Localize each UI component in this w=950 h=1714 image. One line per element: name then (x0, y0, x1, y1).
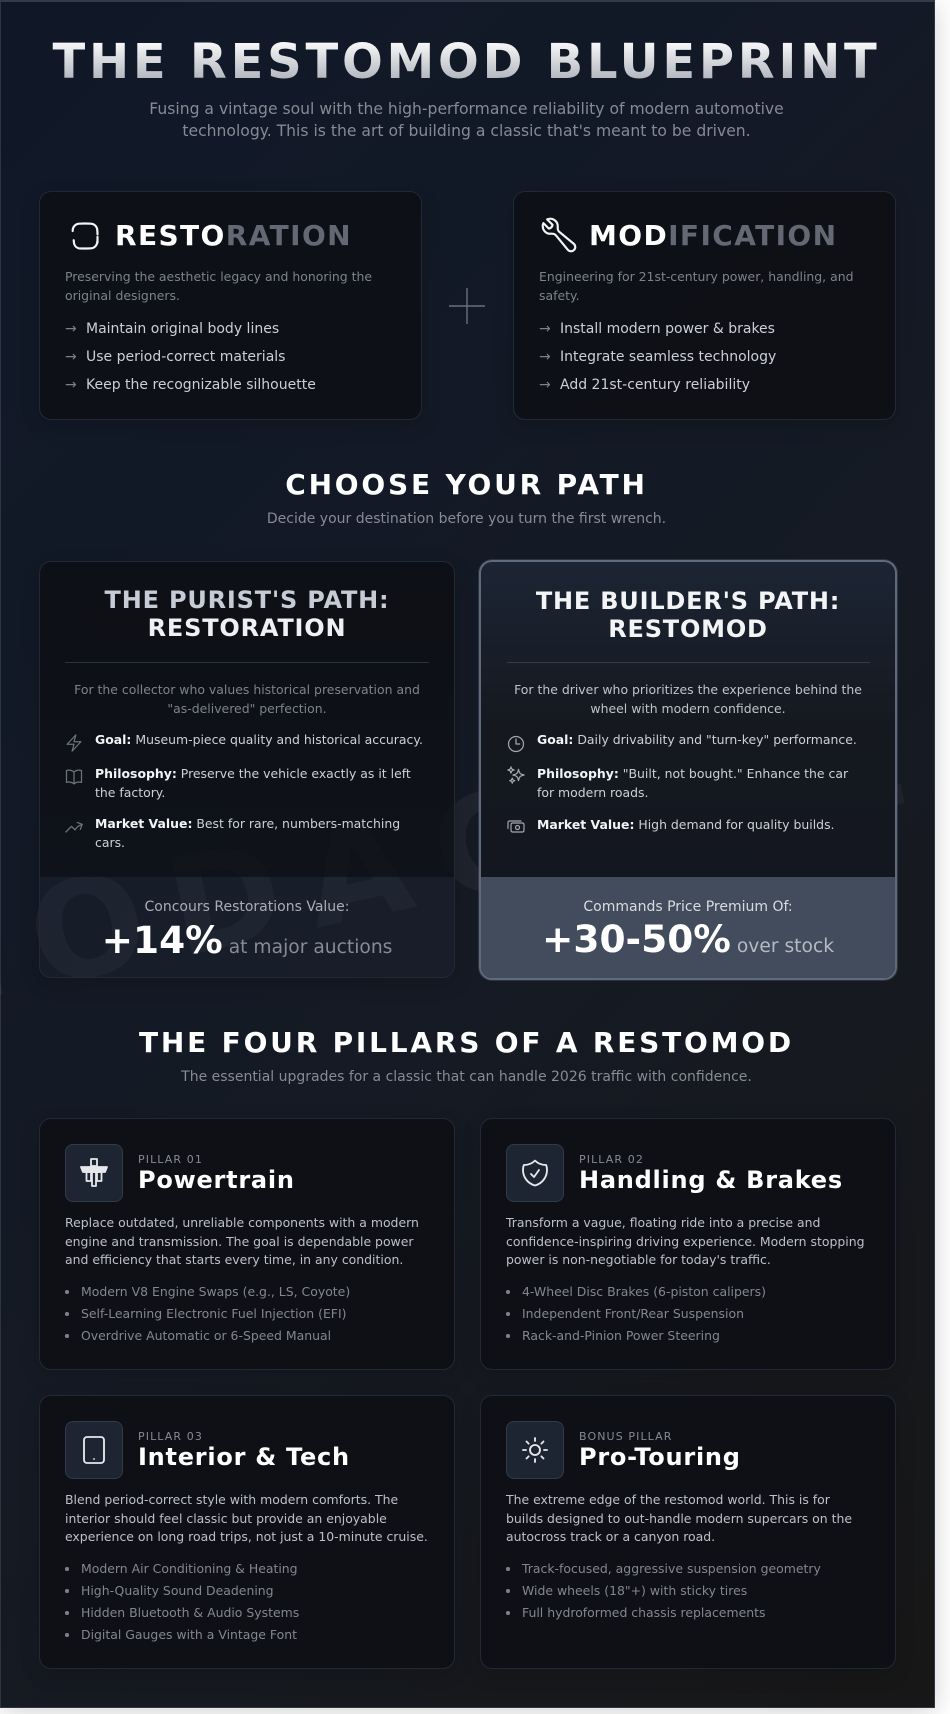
heading: builder's path: RESTOMOD (608, 615, 768, 643)
body text: confidence-inspiring driving experience. Modern stopping (506, 1234, 865, 1249)
label: PILLAR 02 (579, 1153, 644, 1166)
description: modification (539, 268, 854, 302)
description: modification: Engineering for 21st-century power, handling, and (539, 268, 854, 284)
description: modification: safety. (539, 288, 580, 302)
icon: restoration arrows (72, 222, 99, 250)
label: PILLAR 01 (138, 1153, 203, 1166)
list: modification points: Install modern power & brakes (560, 321, 775, 337)
bullet list: Modern Air Conditioning & Heating (81, 1561, 298, 1576)
body text (506, 1492, 852, 1544)
heading: modification: MODIFICATION (589, 218, 837, 252)
icon: sun (506, 1421, 564, 1479)
list: modification points: → (539, 321, 551, 337)
bullet list (506, 1561, 821, 1620)
heading: builder's path: THE BUILDER'S PATH: (536, 587, 840, 615)
panel: pillar 01 powertrain (39, 1118, 455, 1370)
item: philosophy: the factory. (95, 785, 165, 800)
bullet list: Hidden Bluetooth & Audio Systems (81, 1605, 299, 1620)
item: market value (65, 816, 400, 850)
list: restoration points: → (65, 321, 77, 337)
label: BONUS PILLAR (579, 1430, 673, 1443)
body text: power is non-negotiable for today's traffic. (506, 1252, 771, 1267)
list: restoration points: Maintain original body lines (86, 321, 279, 337)
body text (65, 1215, 419, 1267)
description: restoration (65, 268, 372, 302)
panel: builder's path (479, 560, 897, 980)
body text: engine and transmission. The goal is dependable power (65, 1234, 414, 1249)
pillar title: Interior & Tech (138, 1443, 350, 1471)
body text: Transform a vague, floating ride into a precise and (506, 1215, 820, 1230)
panel: pillar 02 handling and brakes (480, 1118, 896, 1370)
body text: The extreme edge of the restomod world. This is for (506, 1492, 830, 1507)
heading: purist's path: RESTORATION (148, 614, 346, 642)
icon: plus connector (449, 288, 485, 324)
heading: restoration: RESTORATION (115, 218, 352, 252)
icon: cash cards (507, 820, 525, 833)
icon: trending up (65, 822, 83, 833)
item: goal: Goal: Daily drivability and "turn-key" performance. (537, 732, 857, 747)
panel: purist's path (39, 561, 455, 978)
description: purist: For the collector who values historical preservation and (74, 682, 420, 697)
item: market value: Market Value: Best for rare, numbers-matching (95, 816, 400, 831)
subtitle: technology. This is the art of building a classic that's meant to be driven. (182, 122, 751, 140)
description: restoration: Preserving the aesthetic legacy and honoring the (65, 268, 372, 284)
divider (507, 662, 870, 663)
body text: Replace outdated, unreliable components with a modern (65, 1215, 419, 1230)
list: modification points: → (539, 377, 551, 393)
bullet list: Rack-and-Pinion Power Steering (522, 1328, 720, 1343)
icon: sparkles (507, 766, 525, 784)
icon: shield (506, 1144, 564, 1202)
heading: choose your path: CHOOSE YOUR PATH (285, 468, 648, 501)
bullet list: Self-Learning Electronic Fuel Injection (EFI) (81, 1306, 346, 1321)
list: modification points: → (539, 349, 551, 365)
subheading: four pillars: The essential upgrades for a classic that can handle 2026 traffic with confidence. (181, 1069, 752, 1085)
icon: book (66, 770, 82, 784)
item: goal (508, 732, 857, 752)
heading: builder's path (536, 587, 840, 643)
icon: tablet (65, 1421, 123, 1479)
body text: autocross track or a canyon road. (506, 1529, 715, 1544)
subheading: choose your path: Decide your destination before you turn the first wrench. (267, 511, 666, 527)
body text: experience on long road trips, not just a 10-minute cruise. (65, 1529, 428, 1544)
bullet list: High-Quality Sound Deadening (81, 1583, 274, 1598)
description: purist (74, 682, 420, 716)
icon: bolt (66, 734, 82, 752)
list: modification points: Add 21st-century reliability (560, 377, 750, 393)
description: builder: For the driver who prioritizes the experience behind the (514, 682, 862, 697)
stat band: restoration value (40, 877, 454, 977)
list: restoration points: Use period-correct materials (86, 349, 285, 365)
item: philosophy (66, 766, 411, 800)
list: modification points (539, 321, 776, 393)
panel: bonus pillar pro-touring (480, 1395, 896, 1669)
icon: clock (508, 736, 524, 752)
body text: builds designed to out-handle modern supercars on the (506, 1511, 852, 1526)
item: philosophy (507, 766, 848, 800)
list: modification points: Integrate seamless technology (560, 349, 776, 365)
list: restoration points: Keep the recognizable silhouette (86, 377, 316, 393)
bullet list: Wide wheels (18"+) with sticky tires (522, 1583, 747, 1598)
item: goal: Goal: Museum-piece quality and historical accuracy. (95, 732, 423, 747)
list: restoration points: → (65, 377, 77, 393)
icon: wrench (542, 218, 576, 252)
bullet list (65, 1561, 299, 1642)
bullet list: Full hydroformed chassis replacements (522, 1605, 765, 1620)
heading: purist's path: THE PURIST'S PATH: (105, 586, 389, 614)
item: philosophy: for modern roads. (537, 785, 648, 800)
bullet list: 4-Wheel Disc Brakes (6-piston calipers) (522, 1284, 766, 1299)
description: builder (514, 682, 862, 716)
stat band: price premium (481, 877, 895, 978)
list: restoration points: → (65, 349, 77, 365)
bullet list: Modern V8 Engine Swaps (e.g., LS, Coyote) (81, 1284, 350, 1299)
body text: and efficiency that starts every time, in any condition. (65, 1252, 403, 1267)
body text (506, 1215, 865, 1267)
stat value: +30-50% over stock (542, 917, 834, 961)
item: market value: Market Value: High demand for quality builds. (537, 817, 835, 832)
body text (65, 1492, 428, 1544)
divider (65, 662, 429, 663)
label: PILLAR 03 (138, 1430, 203, 1443)
heading: four pillars: THE FOUR PILLARS OF A RESTOMOD (139, 1026, 794, 1059)
icon: engine (65, 1144, 123, 1202)
subtitle (149, 100, 784, 140)
item: philosophy: Philosophy: Preserve the vehicle exactly as it left (95, 766, 411, 781)
body text: Blend period-correct style with modern comforts. The (65, 1492, 398, 1507)
body text: interior should feel classic but provide an enjoyable (65, 1511, 387, 1526)
item: philosophy: Philosophy: "Built, not bought." Enhance the car (537, 766, 848, 781)
stat label: Commands Price Premium Of: (583, 899, 793, 915)
item: market value: cars. (95, 835, 125, 850)
bullet list: Independent Front/Rear Suspension (522, 1306, 744, 1321)
bullet list (65, 1284, 350, 1343)
panel: modification (513, 191, 896, 420)
title: THE RESTOMOD BLUEPRINT (52, 34, 881, 90)
stat label: Concours Restorations Value: (145, 899, 349, 915)
stat value: +14% at major auctions (102, 918, 392, 962)
bullet list: Digital Gauges with a Vintage Font (81, 1627, 297, 1642)
panel: pillar 03 interior and tech (39, 1395, 455, 1669)
item: goal (66, 732, 423, 752)
pillar title: Pro-Touring (579, 1443, 741, 1471)
pillar title: Handling & Brakes (579, 1166, 843, 1194)
subtitle: Fusing a vintage soul with the high-performance reliability of modern automotive (149, 100, 784, 118)
bullet list: Overdrive Automatic or 6-Speed Manual (81, 1328, 331, 1343)
pillar title: Powertrain (138, 1166, 295, 1194)
list: restoration points (65, 321, 316, 393)
description: builder: wheel with modern confidence. (590, 701, 786, 716)
bullet list (506, 1284, 766, 1343)
bullet list: Track-focused, aggressive suspension geometry (522, 1561, 821, 1576)
heading: purist's path (104, 586, 389, 642)
description: purist: "as-delivered" perfection. (167, 701, 327, 716)
panel: restoration (39, 191, 422, 420)
description: restoration: original designers. (65, 288, 180, 302)
